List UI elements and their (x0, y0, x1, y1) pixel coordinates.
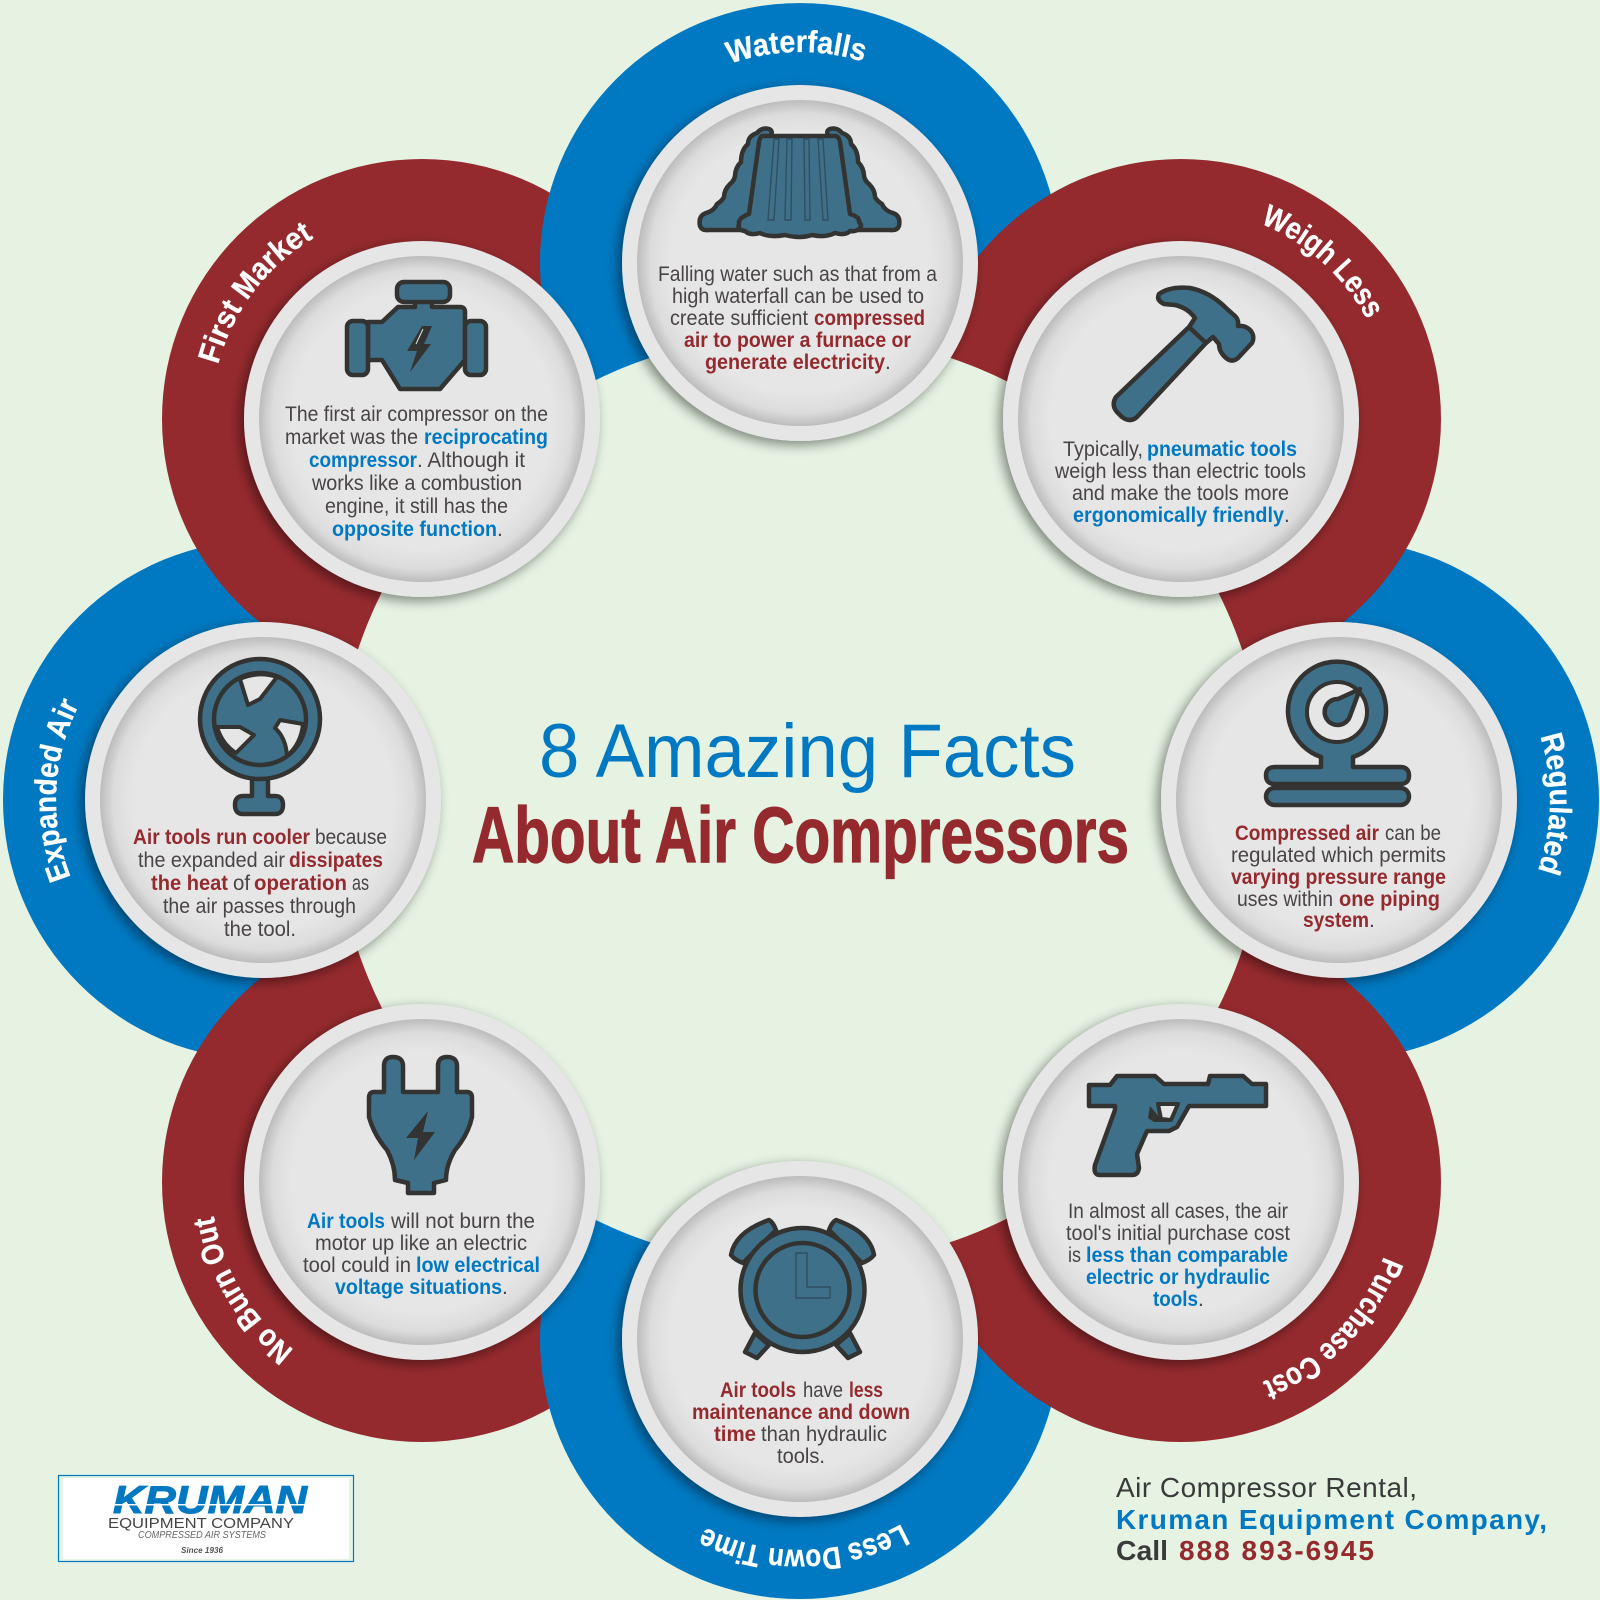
footer contact text: Call (1116, 1535, 1168, 1566)
text: first market: opposite function (332, 518, 497, 541)
text: first market: . Although it (417, 449, 525, 472)
text: weigh less: pneumatic tools (1147, 438, 1297, 461)
text: no burn out: will not burn the (390, 1210, 535, 1233)
title (472, 709, 1129, 879)
text: first market (285, 403, 548, 541)
footer contact text: Air Compressor Rental, (1116, 1472, 1417, 1503)
label: first market: First Market (198, 222, 314, 364)
text: expanded air: dissipates (289, 849, 383, 872)
label: weigh less: Weigh Less (1264, 204, 1380, 318)
text: purchase cost: tools (1153, 1288, 1198, 1311)
text: expanded air: the tool. (224, 918, 296, 941)
icon: fan (200, 659, 320, 814)
ring: first market (162, 159, 682, 679)
panel: waterfalls (610, 30, 981, 454)
icon: hammer (1114, 288, 1253, 420)
ring: waterfalls (540, 3, 1060, 523)
text: waterfalls (658, 263, 937, 374)
logo: Since 1936 (181, 1545, 223, 1555)
text: less down time: maintenance and down (692, 1401, 910, 1424)
text: purchase cost: less than comparable (1086, 1244, 1288, 1267)
text: regulated: can be (1385, 822, 1441, 845)
text: first market: works like a combustion (311, 472, 522, 495)
ring: regulated (1079, 540, 1599, 1060)
text: no burn out: voltage situations (335, 1276, 502, 1299)
text: first market: compressor (309, 449, 417, 472)
text: no burn out: motor up like an electric (315, 1232, 527, 1255)
text: first market: The first air compressor on the (285, 403, 548, 426)
icon: engine (347, 282, 486, 389)
title: 8 Amazing Facts (539, 709, 1076, 794)
text: waterfalls: high waterfall can be used to (672, 285, 924, 308)
text: waterfalls: generate electricity (705, 351, 885, 374)
text: regulated: Compressed air (1235, 822, 1379, 845)
icon: pistol (1089, 1076, 1266, 1175)
text: regulated: varying pressure range (1231, 866, 1446, 889)
text: waterfalls: air to power a furnace or (684, 329, 911, 352)
text: first market: market was the (285, 426, 418, 449)
panel: weigh less (990, 204, 1380, 610)
label: no burn out: No Burn Out (194, 1216, 293, 1366)
text: first market: reciprocating (424, 426, 548, 449)
text: weigh less: Typically, (1063, 438, 1143, 461)
icon: pressure gauge (1266, 662, 1409, 805)
text: waterfalls: compressed (814, 307, 925, 330)
ring: no burn out (162, 922, 682, 1442)
text: regulated: regulated which permits (1231, 844, 1446, 867)
text: regulated (1231, 822, 1446, 932)
icon: waterfall (700, 128, 899, 237)
ring: purchase cost (921, 922, 1441, 1442)
ring: less down time (540, 1079, 1060, 1599)
label: waterfalls: Waterfalls (724, 30, 866, 62)
text: expanded air: Air tools run cooler (133, 826, 310, 849)
text: regulated: system (1303, 909, 1369, 932)
logo: KRUMAN (113, 1479, 308, 1522)
text: less down time: Air tools (720, 1379, 796, 1402)
text: purchase cost: tool's initial purchase cost (1066, 1222, 1290, 1245)
text: expanded air: because (315, 826, 387, 849)
text: no burn out: . (502, 1276, 508, 1299)
text: less down time: time (714, 1423, 756, 1446)
text: purchase cost: is (1068, 1244, 1081, 1267)
panel: expanded air (34, 618, 446, 989)
title: About Air Compressors (472, 790, 1129, 879)
text: purchase cost: electric or hydraulic (1086, 1266, 1270, 1289)
label: purchase cost: Purchase Cost (1262, 1258, 1404, 1400)
panel: no burn out (194, 1000, 604, 1370)
text: expanded air: the expanded air (138, 849, 285, 872)
text: regulated: one piping (1339, 888, 1440, 911)
text: no burn out (303, 1210, 540, 1299)
text: weigh less (1054, 438, 1306, 527)
text: waterfalls: . (885, 351, 891, 374)
logo: EQUIPMENT COMPANY (108, 1515, 294, 1532)
text: purchase cost (1066, 1200, 1290, 1311)
text: less down time: less (849, 1379, 883, 1402)
central background circle (333, 333, 1267, 1267)
panel: purchase cost (990, 1000, 1404, 1400)
text: waterfalls: Falling water such as that from a (658, 263, 937, 286)
icon: alarm clock (731, 1220, 874, 1358)
text: purchase cost: . (1198, 1288, 1204, 1311)
panel: less down time (610, 1156, 982, 1570)
text: less down time (692, 1379, 910, 1468)
panel: first market (198, 222, 604, 610)
text: less down time: tools. (777, 1445, 825, 1468)
text: first market: . (497, 518, 503, 541)
logo: COMPRESSED AIR SYSTEMS (138, 1530, 266, 1541)
text: no burn out: Air tools (307, 1210, 385, 1233)
text: no burn out: tool could in (303, 1254, 411, 1277)
text: weigh less: . (1284, 504, 1290, 527)
text: expanded air: the air passes through (163, 895, 356, 918)
text: first market: engine, it still has the (325, 495, 508, 518)
text: regulated: . (1369, 909, 1375, 932)
panel: regulated (1148, 619, 1572, 988)
label: regulated: Regulated (1538, 732, 1572, 876)
text: no burn out: low electrical (416, 1254, 540, 1277)
text: weigh less: and make the tools more (1072, 482, 1289, 505)
text: less down time: have (803, 1379, 843, 1402)
label: less down time: Less Down Time (700, 1524, 910, 1570)
text: expanded air: as (352, 872, 369, 895)
logo (58, 1476, 354, 1562)
text: purchase cost: In almost all cases, the air (1068, 1200, 1288, 1223)
ring: weigh less (921, 159, 1441, 679)
text: less down time: than hydraulic (761, 1423, 887, 1446)
footer contact text: 888 893-6945 (1179, 1535, 1374, 1566)
text: expanded air: the heat (151, 872, 228, 895)
text: weigh less: weigh less than electric tools (1054, 460, 1306, 483)
text: regulated: uses within (1237, 888, 1333, 911)
icon: plug (369, 1057, 472, 1193)
text: waterfalls: create sufficient (670, 307, 808, 330)
footer contact text (1116, 1472, 1547, 1566)
text: expanded air: of (233, 872, 250, 895)
text: expanded air (133, 826, 387, 941)
footer contact text: Kruman Equipment Company, (1116, 1504, 1547, 1535)
ring: expanded air (3, 540, 523, 1060)
text: expanded air: operation (254, 872, 347, 895)
label: expanded air: Expanded Air (34, 698, 77, 883)
text: weigh less: ergonomically friendly (1073, 504, 1284, 527)
